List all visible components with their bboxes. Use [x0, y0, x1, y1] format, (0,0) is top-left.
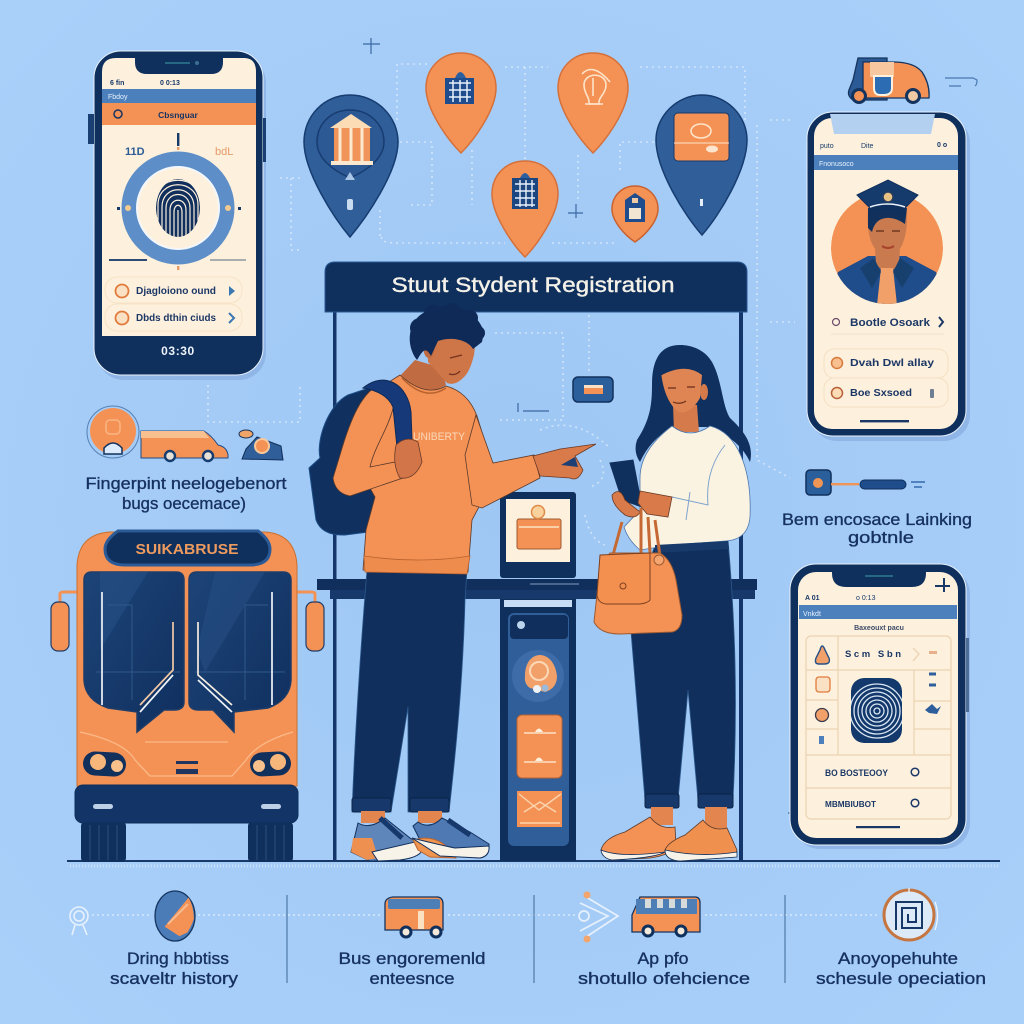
chevron [913, 648, 919, 661]
neck [673, 405, 699, 432]
counter [317, 579, 757, 599]
caption: fingerprint: bugs oecemace) [122, 495, 246, 513]
student with phone [594, 345, 751, 861]
destination sign: SUIKABRUSE [136, 542, 239, 558]
face [661, 364, 702, 412]
pin: lower building [492, 161, 558, 257]
footer item three [578, 892, 750, 988]
backpack strap [363, 380, 412, 447]
caption: Ap pfo [638, 950, 688, 968]
caption: shotullo ofehcience [578, 970, 750, 988]
orange header [102, 103, 256, 125]
ear [424, 340, 434, 358]
sweater hem [364, 556, 470, 574]
profile row: Bootle Osoark [850, 317, 931, 329]
row: history: BO BOSTEOOY [825, 768, 888, 778]
status text: 6 fin [110, 80, 124, 87]
icon: camera [239, 430, 283, 460]
small dash [929, 651, 937, 654]
phone: fingerprint scan [88, 51, 266, 380]
face [427, 337, 476, 384]
blue bar [799, 605, 957, 619]
pin: orange building [426, 53, 496, 153]
option card one [824, 349, 948, 378]
status bar label: Fbdoy [108, 94, 128, 101]
phone: driver profile [807, 112, 970, 441]
chest lettering: UNIBERTY [413, 431, 466, 443]
row text: Scm Sbn [845, 649, 901, 660]
destination sign [105, 531, 270, 565]
hair back [636, 345, 751, 462]
header label: Cbsnguar [158, 110, 199, 120]
facial features [668, 387, 695, 403]
icon: orange dial [816, 708, 828, 722]
caption [110, 950, 239, 988]
icon: ticket [155, 891, 195, 941]
neck [400, 360, 446, 391]
signal dots [584, 892, 590, 942]
footer dotted links [92, 914, 880, 916]
sweater [624, 426, 750, 550]
icon: lock [816, 677, 830, 692]
icon: fingerprint seal [884, 888, 938, 940]
driver portrait [831, 180, 943, 304]
screen title: Baxeouxt pacu [854, 625, 904, 632]
facial features [449, 355, 462, 375]
mirrors [51, 592, 324, 651]
right shoe [665, 820, 737, 861]
pin: orange lamp [558, 53, 628, 153]
option card two: Boe Sxsoed [850, 387, 912, 399]
left shoe [601, 817, 676, 860]
right label: bdL [215, 146, 233, 158]
trousers [631, 540, 735, 800]
pin: wallet card [656, 95, 747, 235]
status labels: puto [820, 143, 834, 150]
near arm [333, 383, 403, 496]
icon: orange van [141, 431, 228, 461]
footer dividers [287, 895, 785, 983]
left label: 11D [125, 146, 145, 158]
option card one: Dvah Dwl allay [850, 357, 934, 369]
backpack [309, 385, 402, 535]
belt [655, 541, 729, 553]
tyres [81, 822, 293, 862]
caption [816, 950, 986, 988]
icon: side bus [632, 897, 700, 936]
pedestal [500, 599, 576, 861]
status middle: Dite [861, 143, 874, 150]
ankles [651, 807, 727, 829]
blue bar [814, 155, 958, 170]
front panel trim [80, 732, 293, 776]
icon: bag [815, 646, 829, 664]
window reflections [96, 572, 285, 700]
sleeve fold [672, 445, 725, 520]
caption: schesule opeciation [816, 970, 986, 988]
right window [189, 572, 291, 732]
footer item one [70, 891, 239, 988]
caption [338, 950, 486, 988]
menu card two [105, 304, 242, 331]
icon: side marks [929, 674, 936, 685]
caption: Dring hbbtiss [127, 950, 229, 968]
grid table [806, 636, 951, 819]
fingerprint [156, 179, 200, 237]
finger shadow [561, 457, 578, 467]
menu card two: Dbds dthin ciuds [136, 313, 216, 324]
sweater torso [360, 375, 491, 572]
jeans [352, 570, 467, 812]
cuffs [645, 794, 733, 808]
status left: A 01 [805, 595, 820, 602]
phone: fingerprint table [790, 564, 970, 849]
hair fringe [660, 354, 716, 395]
icon: delivery truck [848, 58, 977, 102]
pointing arm [465, 415, 540, 508]
jeans cuffs [352, 798, 449, 812]
kiosk roof [325, 262, 747, 312]
left window [84, 572, 184, 732]
caption: fingerprint [86, 475, 287, 513]
caption: linking: gobtnle [848, 528, 914, 547]
caption: scaveltr history [110, 970, 239, 988]
grille [176, 761, 198, 774]
phone [610, 460, 642, 507]
icon: connector key [806, 470, 925, 495]
monitor [500, 492, 576, 578]
other hand [638, 491, 672, 517]
footer item two [338, 897, 486, 988]
kiosk poles [333, 310, 743, 861]
icon: loop [70, 907, 88, 935]
pin: bank [304, 95, 398, 237]
menu card one: Djagloiono ound [136, 286, 216, 297]
caption: Anoyopehuhte [838, 950, 958, 968]
plus marks [363, 38, 802, 820]
clock: 03:30 [161, 344, 195, 358]
hanging tag [573, 377, 613, 402]
holding hand [612, 491, 640, 517]
profile row [831, 317, 944, 334]
caption [578, 950, 750, 988]
caption: fingerprint: Fingerpint neelogebenort [86, 475, 287, 493]
hair [410, 303, 485, 360]
bar label: Vnkdt [803, 611, 821, 618]
fist [395, 439, 422, 478]
bag straps [613, 508, 660, 556]
option card two [824, 378, 948, 407]
caption: Bus engoremenld [338, 950, 486, 968]
footer item four [816, 888, 986, 988]
envelope [517, 791, 562, 827]
ankles [361, 811, 442, 823]
bus body [77, 532, 297, 786]
row: member: MBMBIUBOT [825, 799, 877, 809]
student with backpack [309, 303, 596, 861]
icon: map dots [925, 704, 941, 714]
right shoe [412, 818, 489, 858]
kiosk title: Stuut Stydent Registration [392, 274, 674, 297]
left shoe [351, 818, 423, 861]
wipers [102, 592, 272, 712]
icon: signal [579, 897, 618, 937]
pointing hand [533, 444, 596, 479]
dotted connector network [208, 64, 795, 545]
ear [700, 384, 708, 400]
icon: orange bus [385, 897, 443, 937]
icon: small tag [819, 736, 824, 744]
status time: 0 0:13 [160, 80, 180, 87]
status bar [102, 89, 256, 103]
bus [51, 531, 324, 862]
option panel [517, 715, 562, 778]
headlights [82, 751, 292, 777]
caption: linking [782, 510, 972, 547]
bumper [75, 785, 298, 823]
row: member [825, 799, 919, 809]
menu card one [105, 277, 242, 303]
caption: linking: Bem encosace Lainking [782, 510, 972, 529]
handbag [594, 553, 682, 634]
collar [402, 378, 446, 393]
caption: enteesnce [370, 970, 454, 988]
blue bar label: Fnonusoco [819, 161, 854, 168]
header icon [114, 110, 122, 118]
status right: 0 o [937, 142, 947, 149]
scan dial [512, 650, 564, 702]
kiosk [317, 262, 757, 861]
icon: fingerprint badge [87, 406, 139, 458]
fingerprint [850, 678, 904, 743]
status centre: o 0:13 [856, 595, 876, 602]
scanner ring [109, 133, 246, 270]
pin: small house [612, 186, 658, 242]
ground line [67, 860, 1000, 866]
